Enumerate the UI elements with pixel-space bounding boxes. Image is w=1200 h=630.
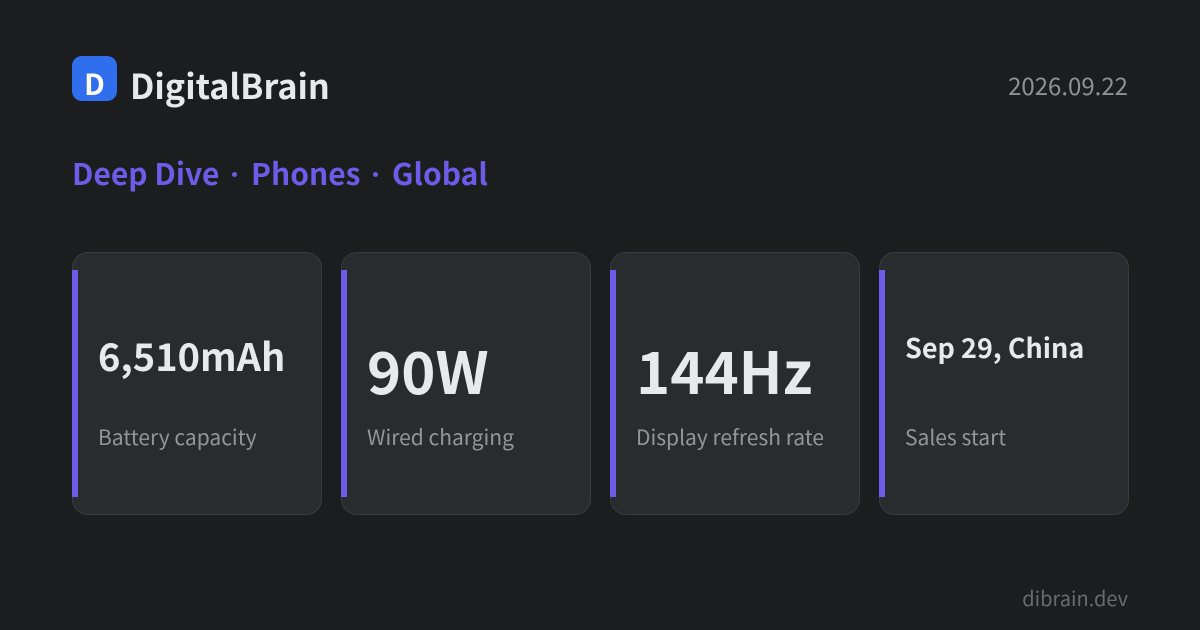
brand name: DigitalBrain <box>130 59 330 109</box>
label: Display refresh rate <box>636 422 824 452</box>
category: deep dive: Deep Dive <box>72 150 219 194</box>
value: 6,510mAh <box>98 327 285 382</box>
category: phones: Phones <box>251 150 360 194</box>
value: Sep 29, China <box>905 327 1084 366</box>
date: 2026.09.22 <box>1008 67 1128 102</box>
footer domain: dibrain.dev <box>1022 583 1128 612</box>
logo icon <box>72 56 117 101</box>
separator dot <box>232 172 237 177</box>
card: sales start <box>879 252 1129 515</box>
category line <box>72 150 488 194</box>
card: refresh rate <box>610 252 860 515</box>
separator dot <box>373 172 378 177</box>
accent bar <box>341 270 347 497</box>
card: battery <box>72 252 322 515</box>
accent bar <box>72 270 78 497</box>
label: Wired charging <box>367 422 514 452</box>
card: charging <box>341 252 591 515</box>
value: 144Hz <box>636 327 812 411</box>
category: global: Global <box>392 150 488 194</box>
label: Battery capacity <box>98 422 257 452</box>
accent bar <box>879 270 885 497</box>
value: 90W <box>367 327 489 411</box>
logo icon: D <box>84 62 105 104</box>
label: Sales start <box>905 422 1006 452</box>
accent bar <box>610 270 616 497</box>
